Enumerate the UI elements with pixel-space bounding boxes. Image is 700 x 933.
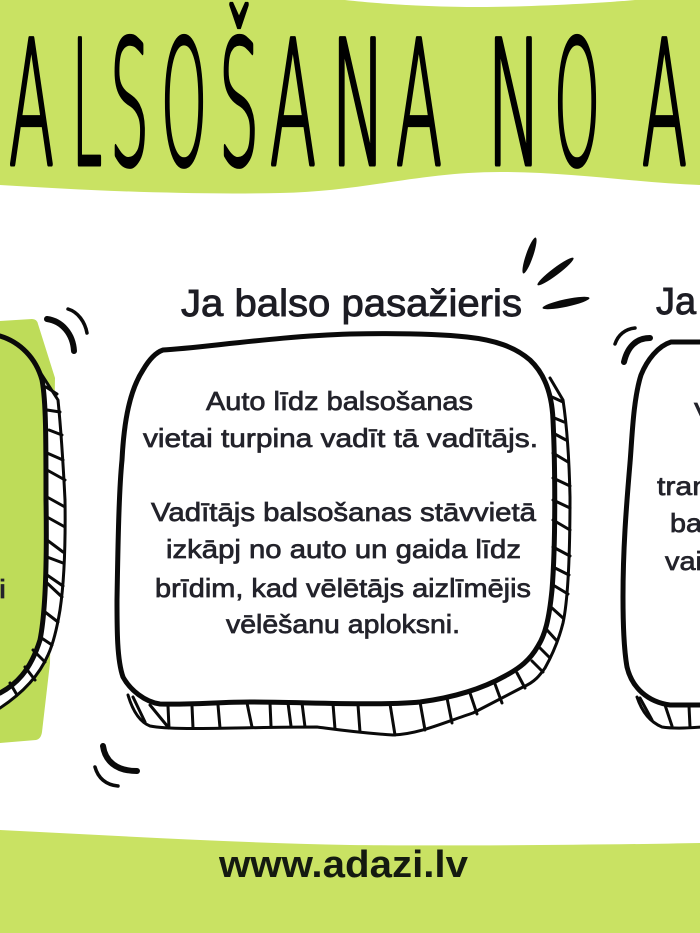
icon: bottom-left accent marks [95, 746, 137, 786]
panel: right card [623, 342, 700, 728]
white notch at top of banner [345, 0, 635, 7]
title: N [487, 4, 542, 205]
title: O [554, 4, 600, 205]
title [0, 4, 687, 205]
right card outline [623, 342, 700, 728]
middle card outline [117, 334, 570, 735]
left card outlines [0, 336, 65, 708]
title: A [9, 4, 54, 205]
middle card body text: Vadītājs balsošanas stāvvietā [151, 497, 537, 527]
middle card body text: vēlēšanu aploksni. [226, 609, 460, 639]
left card white ribbon [0, 372, 65, 708]
title: O [161, 4, 207, 205]
icon: burst marks [520, 236, 590, 312]
heading: middle card: Ja balso pasažieris [181, 283, 522, 325]
header green banner [0, 0, 700, 193]
panel: left card [0, 319, 65, 743]
middle card body text [143, 386, 538, 639]
left card green backing [0, 319, 55, 743]
middle card body text: vietai turpina vadīt tā vadītājs. [143, 423, 538, 453]
title: A [396, 4, 442, 205]
title: N [331, 4, 386, 205]
icon: right card accent marks [615, 328, 650, 362]
website url: www.adazi.lv [218, 844, 468, 886]
icon: left card top accent marks [47, 309, 87, 351]
middle card body text: Auto līdz balsošanas [206, 386, 473, 416]
middle card body text: izkāpj no auto un gaida līdz [166, 534, 521, 564]
panel: middle card [117, 334, 570, 735]
right card clipped text: vai [665, 546, 700, 576]
title: S [110, 4, 149, 205]
footer green band [0, 830, 700, 933]
title: A [270, 4, 316, 205]
title: Š [219, 4, 259, 205]
middle card body text: brīdim, kad vēlētājs aizlīmējis [155, 573, 531, 603]
right card clipped text: ba [670, 508, 700, 538]
title: L [72, 4, 102, 205]
right card clipped text [657, 397, 700, 576]
